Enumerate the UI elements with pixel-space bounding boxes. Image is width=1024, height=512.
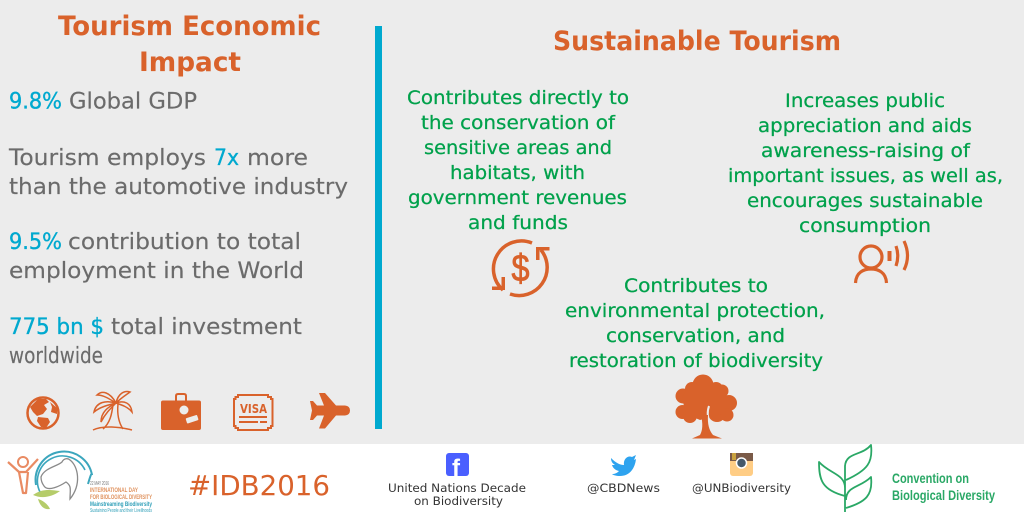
stat: tourism employment: Tourism employs bbox=[8, 146, 206, 171]
text: conservation contribution: sensitive areas and bbox=[424, 137, 612, 159]
heading: tourism economic impact: Impact bbox=[139, 47, 241, 78]
heading: tourism economic impact: Tourism Economic bbox=[58, 11, 321, 42]
stat: tourism employment: more bbox=[247, 146, 308, 171]
social: facebook: f bbox=[452, 455, 461, 482]
stat: total investment: worldwide bbox=[9, 344, 103, 369]
text: conservation contribution: Contributes directly to bbox=[407, 87, 629, 109]
stat: total investment: 775 bn $ bbox=[9, 315, 104, 340]
icon: airplane bbox=[310, 393, 350, 428]
logo: convention on biological diversity: Convention on bbox=[892, 470, 969, 486]
text: public appreciation: Increases public bbox=[785, 90, 945, 112]
stat: contribution to employment: 9.5% bbox=[9, 230, 62, 255]
divider bar bbox=[375, 26, 382, 429]
icon: suitcase bbox=[161, 394, 201, 430]
logo: convention on biological diversity: Biological Diversity bbox=[892, 487, 995, 503]
social: facebook: on Biodiversity bbox=[414, 494, 503, 508]
social: facebook bbox=[388, 453, 526, 508]
stat: total investment bbox=[9, 315, 302, 369]
logo: convention on biological diversity bbox=[819, 445, 995, 512]
heading: tourism economic impact bbox=[58, 11, 321, 78]
text: environmental protection: restoration of biodiversity bbox=[569, 350, 823, 372]
icon: money cycle bbox=[492, 241, 550, 296]
panel: sustainable tourism bbox=[407, 26, 1003, 438]
icon: person speaking bbox=[856, 241, 908, 283]
logo: international day for biological diversity: Mainstreaming Biodiversity bbox=[90, 502, 153, 508]
icon: money cycle: $ bbox=[512, 248, 530, 290]
stat: global GDP bbox=[9, 90, 197, 114]
stat: contribution to employment: contribution to total bbox=[68, 230, 301, 255]
text: public appreciation: consumption bbox=[799, 215, 931, 237]
stat: tourism employment: than the automotive industry bbox=[9, 175, 348, 200]
footer bbox=[8, 445, 995, 512]
logo: international day for biological diversity: 22 MAY 2016 bbox=[90, 481, 109, 487]
social: instagram: @UNBiodiversity bbox=[692, 481, 791, 495]
logo: international day for biological diversity bbox=[8, 452, 153, 512]
stat: tourism employment bbox=[8, 146, 348, 200]
logo: international day for biological diversity: FOR BIOLOGICAL DIVERSITY bbox=[90, 495, 152, 501]
stat: contribution to employment: employment in the World bbox=[9, 259, 304, 284]
hashtag: #IDB2016 bbox=[188, 470, 330, 502]
icon: tree bbox=[676, 374, 737, 438]
icon: visa card: VISA bbox=[240, 402, 268, 416]
icon: globe bbox=[28, 398, 58, 428]
text: conservation contribution: habitats, with bbox=[450, 162, 585, 184]
social: twitter bbox=[587, 455, 660, 495]
text: conservation contribution: government revenues bbox=[408, 187, 627, 209]
panel: tourism economic impact bbox=[8, 11, 350, 430]
social: facebook: United Nations Decade bbox=[388, 481, 526, 495]
stat: global GDP: Global GDP bbox=[69, 90, 197, 114]
stat: contribution to employment bbox=[9, 230, 304, 284]
text: conservation contribution bbox=[407, 87, 629, 234]
text: environmental protection bbox=[565, 275, 825, 372]
text: conservation contribution: and funds bbox=[468, 212, 568, 234]
text: environmental protection: conservation, and bbox=[606, 325, 785, 347]
icon: palm tree bbox=[93, 391, 132, 430]
social: twitter: @CBDNews bbox=[587, 481, 660, 495]
text: conservation contribution: the conservation of bbox=[421, 112, 616, 134]
text: public appreciation bbox=[728, 90, 1003, 237]
text: environmental protection: environmental protection, bbox=[565, 300, 825, 322]
social: instagram bbox=[692, 453, 791, 495]
text: public appreciation: encourages sustainable bbox=[747, 190, 983, 212]
stat: tourism employment: 7x bbox=[214, 146, 239, 171]
icon: visa card bbox=[234, 395, 272, 430]
stat: global GDP: 9.8% bbox=[9, 90, 62, 114]
text: environmental protection: Contributes to bbox=[624, 275, 768, 297]
text: public appreciation: important issues, as well as, bbox=[728, 165, 1003, 187]
text: public appreciation: awareness-raising of bbox=[761, 140, 971, 162]
stat: total investment: total investment bbox=[111, 315, 302, 340]
heading: sustainable tourism: Sustainable Tourism bbox=[553, 26, 841, 57]
text: public appreciation: appreciation and aids bbox=[758, 115, 972, 137]
logo: international day for biological diversity: INTERNATIONAL DAY bbox=[90, 488, 138, 494]
